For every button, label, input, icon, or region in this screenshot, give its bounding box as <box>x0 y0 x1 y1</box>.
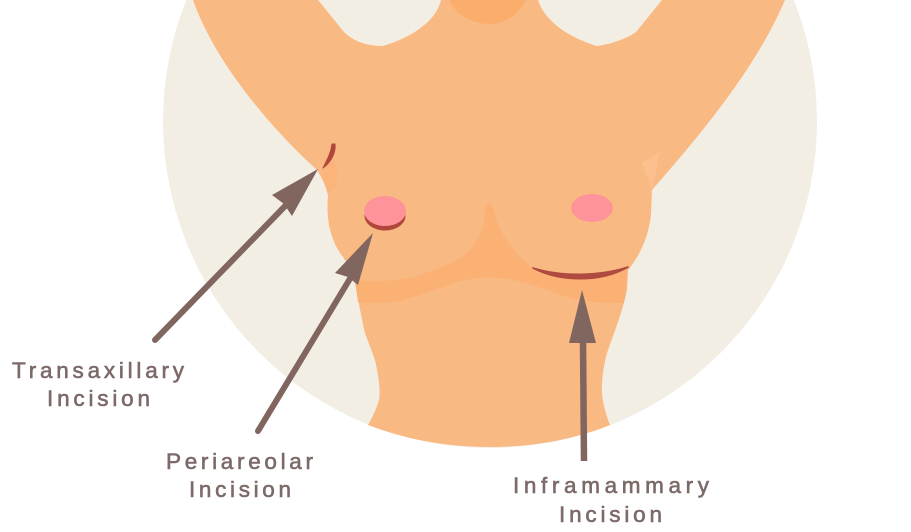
label: periareolar incision: Incision <box>189 477 291 502</box>
arrow: inframammary <box>569 290 596 461</box>
underbust shadow <box>355 203 628 303</box>
torso illustration <box>193 0 785 447</box>
right areola <box>571 194 613 222</box>
arrow: periareolar <box>258 233 373 431</box>
periareolar incision <box>364 202 406 230</box>
label: periareolar incision: Periareolar <box>166 449 314 474</box>
label: transaxillary incision: Transaxillary <box>12 358 185 383</box>
label: transaxillary incision <box>12 358 185 411</box>
inframammary incision <box>533 267 628 279</box>
label: inframammary incision: Inframammary <box>513 473 710 498</box>
transaxillary incision <box>323 144 335 168</box>
left areola <box>364 196 406 226</box>
label: periareolar incision <box>166 449 314 502</box>
background circle <box>163 0 817 448</box>
arrow: transaxillary <box>155 169 318 340</box>
label: inframammary incision: Incision <box>559 502 662 527</box>
label: inframammary incision <box>513 473 710 527</box>
label: transaxillary incision: Incision <box>47 386 150 411</box>
right armpit shadow <box>642 152 660 190</box>
neck shadow <box>449 0 526 24</box>
torso body <box>193 0 785 447</box>
left armpit shadow <box>322 150 338 195</box>
